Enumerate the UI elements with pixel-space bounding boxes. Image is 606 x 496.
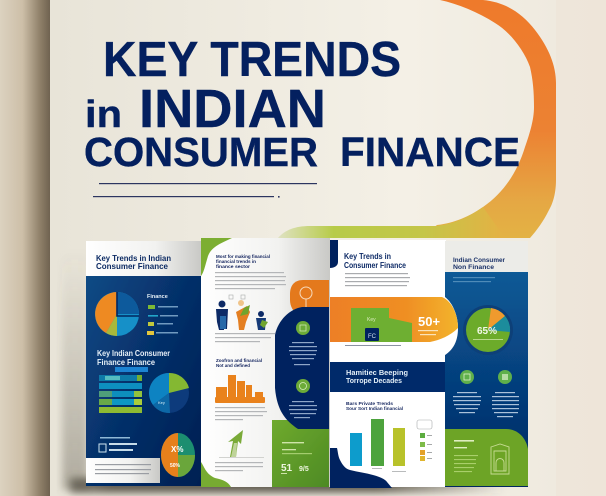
donut stat 65%: [463, 305, 513, 355]
title: KEY TRENDS: [103, 33, 401, 87]
second pie chart: [149, 373, 189, 413]
arrow caption: [215, 462, 263, 471]
page 4 text right: [492, 392, 519, 417]
bar chart heading: Zoofron and financial: [216, 358, 262, 363]
green bottom panel: [445, 429, 528, 486]
oval stat: X%: [171, 445, 183, 454]
bar chart heading: [346, 401, 403, 411]
bar chart heading: [216, 358, 262, 368]
panel: brochure page 2: [201, 238, 330, 487]
navy corner bottom: [330, 448, 392, 488]
page 4 header: Indian Consumer: [453, 257, 505, 264]
pie legend: Finance: [147, 294, 168, 300]
page 2 heading: Most for making financial: [216, 254, 270, 259]
navy corner: [330, 240, 338, 268]
page 3 heading: Key Trends in: [344, 252, 391, 261]
orange band across pages 3 and 4: [330, 297, 458, 362]
page 4 header: [445, 241, 528, 272]
green stat box: 9/5: [299, 466, 309, 473]
oval stat: 50%: [170, 463, 181, 469]
page 3 heading: Consumer Finance: [344, 261, 406, 270]
page 2 heading: [216, 254, 270, 269]
page 1 subheading: Key Indian Consumer: [97, 349, 170, 358]
page 1 header: Consumer Finance: [96, 261, 168, 271]
navy band: Hamitiec Beeping: [346, 368, 408, 377]
green corner top: [201, 238, 232, 276]
donut stat 65%: 65%: [477, 326, 497, 337]
second pie chart: Key: [158, 400, 165, 405]
page 4 header: Non Finance: [453, 264, 494, 271]
green corner bottom: [201, 462, 231, 487]
oval stat: [161, 433, 195, 477]
page 4 icon left: [460, 370, 474, 384]
page 2 paragraph: [215, 272, 286, 289]
pie chart: [95, 292, 139, 336]
page 1 note with icon: [99, 437, 137, 452]
title: [84, 33, 520, 175]
bar chart heading: Sour Sort Indian financial: [346, 406, 403, 411]
green stat box: [272, 420, 329, 487]
title: CONSUMER: [84, 129, 318, 175]
panel: brochure page 1: [86, 241, 201, 486]
vertical bar chart: [350, 419, 406, 472]
title: INDIAN: [139, 79, 326, 139]
title: in: [85, 94, 122, 136]
page 1 header: Key Trends in Indian: [96, 253, 171, 263]
bar chart heading: Bars Private Trends: [346, 401, 394, 406]
shadow under brochure: [62, 250, 510, 493]
green money illustration: Key: [367, 317, 376, 323]
page 4 icon right: [498, 370, 512, 384]
green panel text: [454, 440, 478, 472]
page 2 icon two: [296, 379, 310, 393]
green arrow chart: [219, 430, 264, 458]
navy band: Torrope Decades: [346, 376, 402, 385]
page 1 subheading: Finance Finance: [97, 358, 156, 367]
page 2 icon one: [296, 321, 310, 335]
title: FINANCE: [340, 129, 520, 175]
page 1 header: [86, 241, 201, 276]
orange callout: [290, 280, 329, 314]
panel: brochure page 3: [330, 240, 446, 488]
page 3 heading: [344, 252, 406, 270]
green money illustration: FC: [368, 334, 377, 340]
page 3 paragraph: [345, 273, 410, 286]
page 4 intro lines: [453, 277, 495, 282]
people illustration: [216, 295, 268, 330]
page 4 text left: [453, 392, 481, 413]
stat 50+: 50+: [418, 314, 440, 329]
navy band: [330, 362, 446, 392]
panel: brochure page 4: [445, 241, 528, 487]
page 1 white note: [86, 458, 160, 483]
page 2 heading: finance sector: [216, 264, 250, 269]
page 2 caption: [215, 333, 275, 342]
orange swoosh: [420, 0, 556, 238]
navy text one: [289, 342, 317, 365]
thin rule: [345, 345, 401, 346]
chart caption: [215, 407, 267, 420]
pie legend: [147, 294, 178, 335]
green money illustration: [351, 308, 412, 342]
green stat box: 51: [281, 463, 293, 474]
page 1 subheading: [97, 349, 170, 367]
horizontal bars: [99, 367, 148, 413]
title underlines: [93, 183, 317, 198]
navy column: [275, 307, 329, 429]
icon: shrine building: [491, 444, 509, 474]
page 2 heading: financial trends in: [216, 259, 256, 264]
orange bar chart: [215, 375, 265, 403]
green swoosh base: [278, 207, 505, 238]
bar legend: [417, 420, 432, 461]
navy text two: [289, 401, 317, 418]
bar chart heading: Not and defined: [216, 363, 250, 368]
